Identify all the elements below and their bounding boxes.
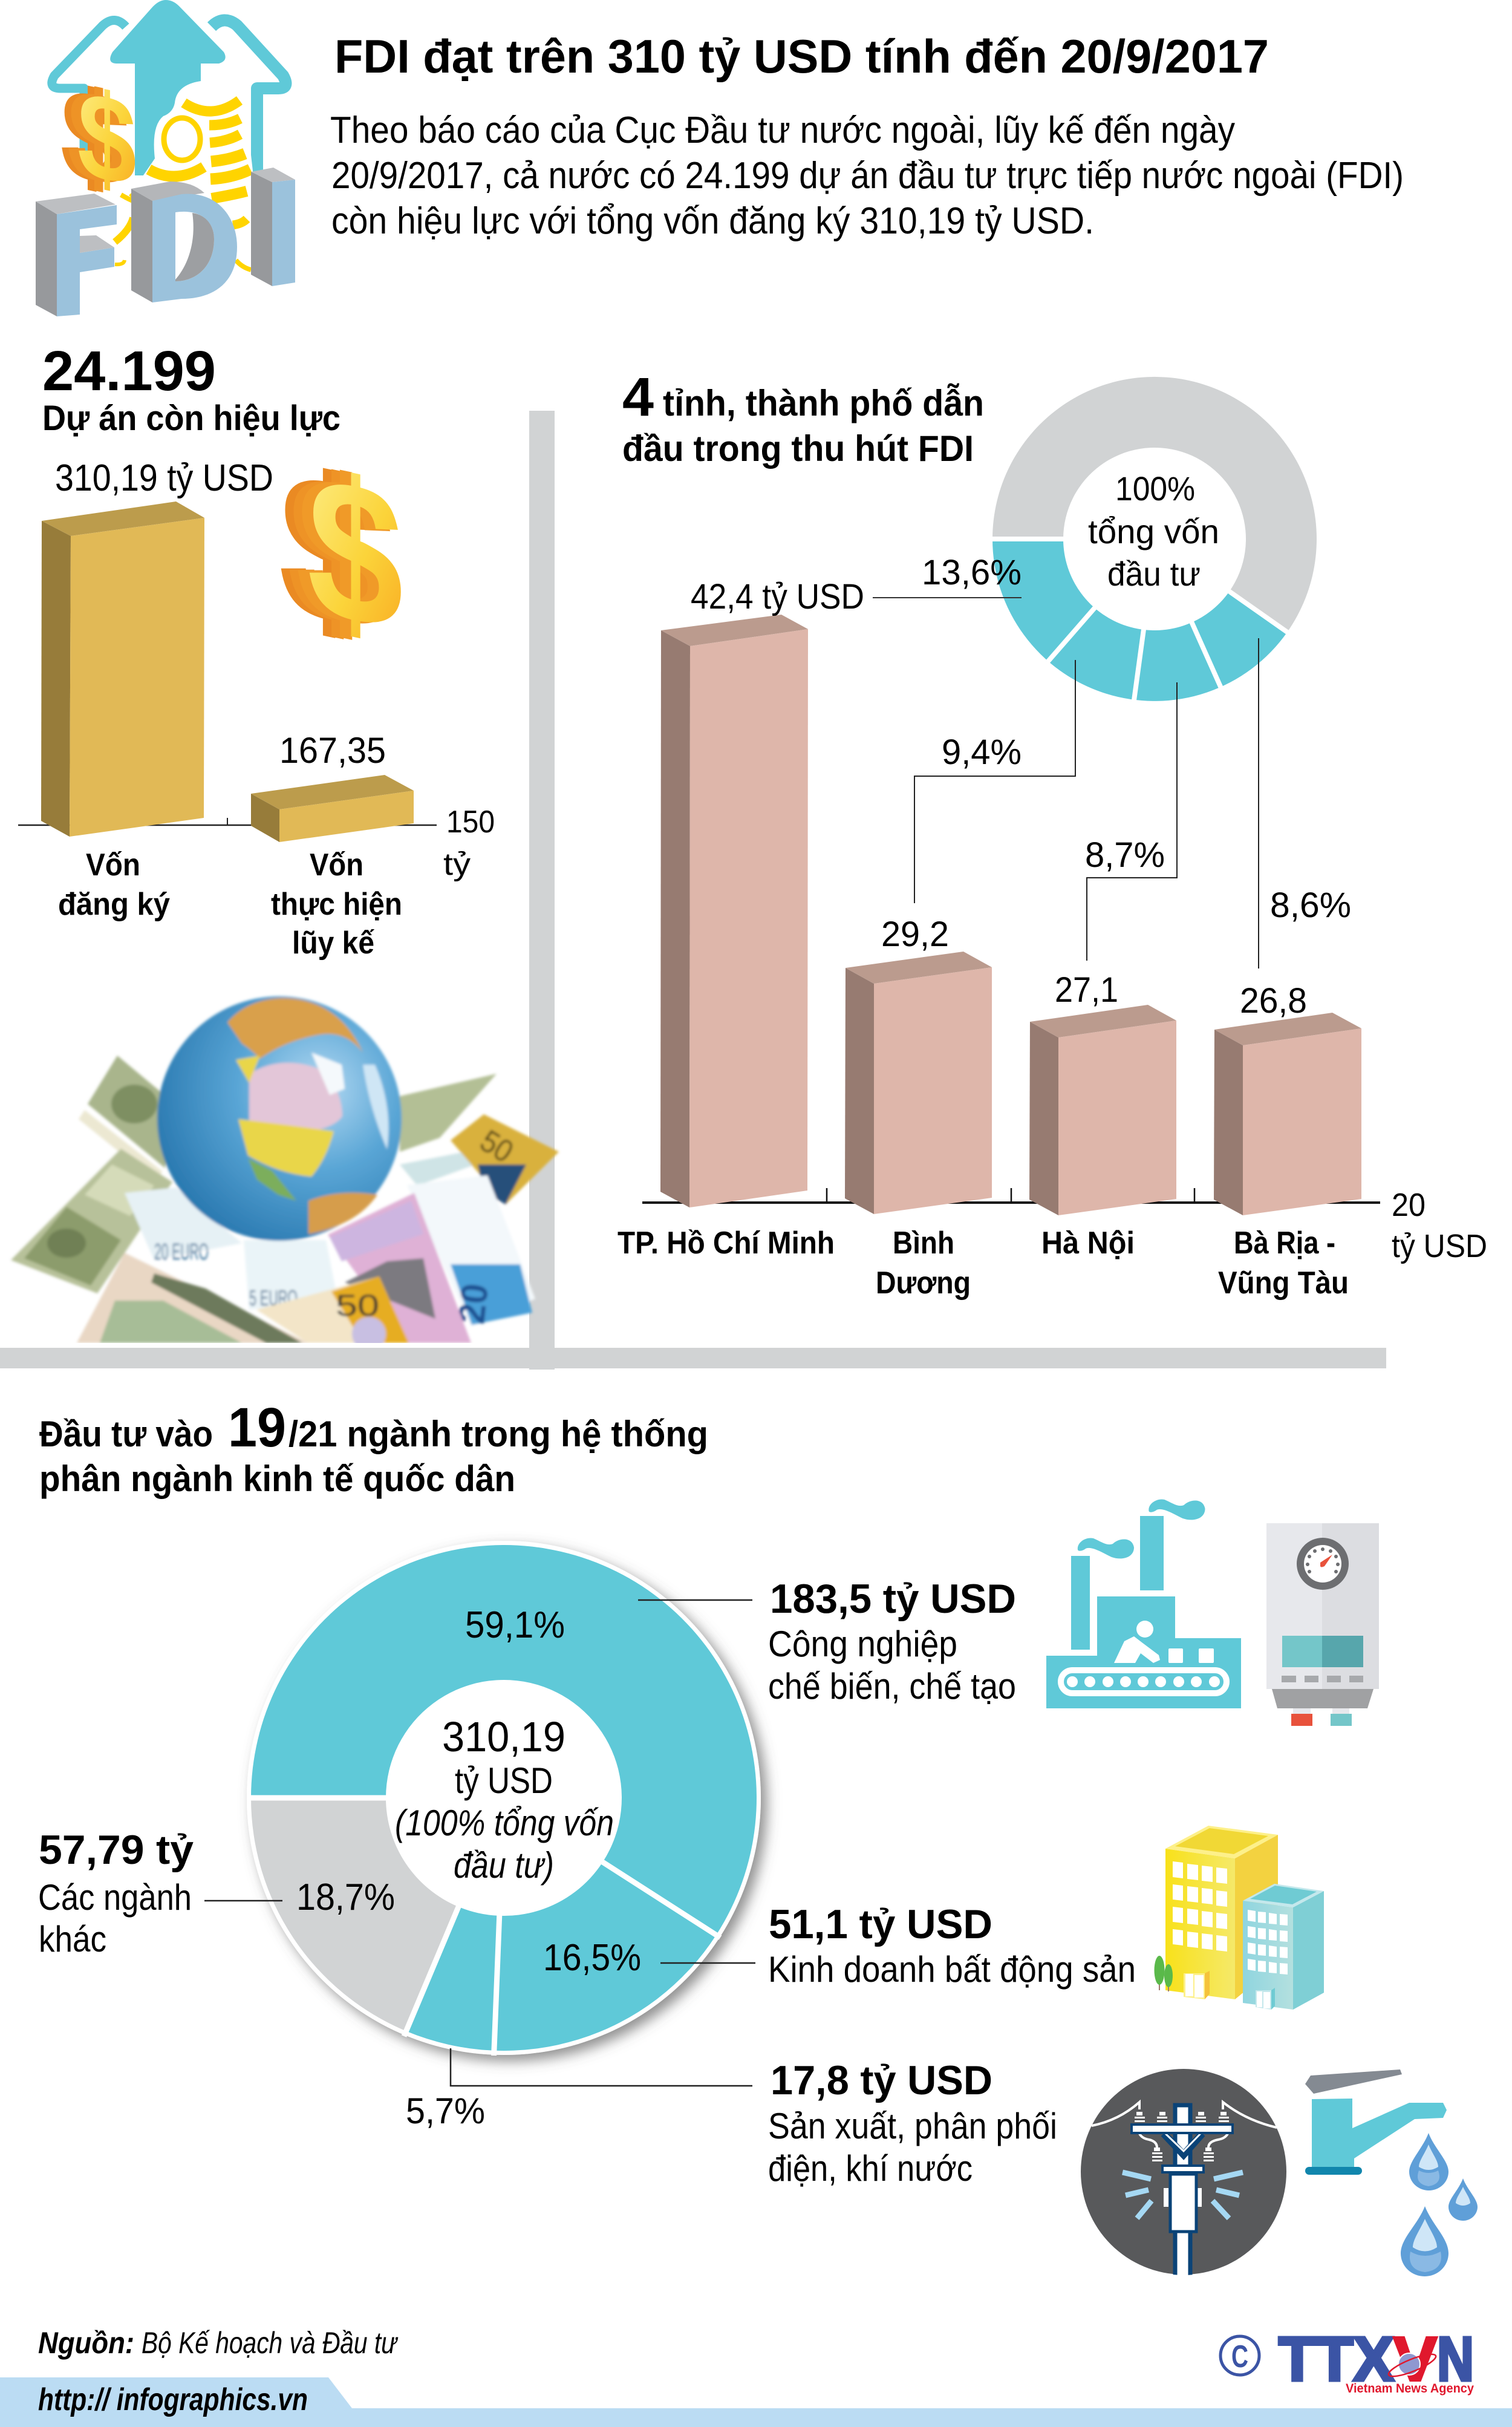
bar chart: top 4 provinces: 20 bbox=[1392, 1187, 1426, 1223]
bar chart: registered vs implemented capital: 167,35 bbox=[279, 730, 386, 771]
bar chart: registered vs implemented capital: 310,19 tỷ USD bbox=[55, 457, 273, 499]
source: Bộ Kế hoạch và Đầu tư bbox=[142, 2326, 399, 2360]
callouts: donut percentages with leader lines bbox=[873, 553, 1351, 969]
donut chart: share of total capital: đầu tư bbox=[1107, 555, 1201, 593]
bar chart: registered vs implemented capital: lũy kế bbox=[292, 926, 374, 961]
banknote: euro pale strip right bbox=[400, 1151, 474, 1185]
banknote: euro five bbox=[244, 1240, 337, 1310]
globe bbox=[157, 996, 402, 1241]
bar: registered capital bbox=[41, 501, 204, 837]
donut chart: capital by sector bbox=[247, 1541, 761, 2056]
banknote: dollar top-left bbox=[79, 1054, 168, 1175]
stat: 24.199 projects: 24.199 bbox=[42, 339, 216, 402]
heading: 19 of 21 sectors bbox=[39, 1397, 708, 1499]
icon: golden dollar sign: $ bbox=[289, 430, 385, 675]
callout: real estate: Kinh doanh bất động sản bbox=[768, 1949, 1136, 1990]
banknote: euro five: 5 EURO bbox=[249, 1285, 298, 1310]
footer band bbox=[0, 2377, 1512, 2427]
logo: copyright and TTXVN: V bbox=[1393, 2324, 1437, 2394]
icon: water drops bbox=[1401, 2133, 1478, 2276]
bar chart: top 4 provinces: Vũng Tàu bbox=[1218, 1266, 1349, 1301]
callout: electricity, gas and water: điện, khí nước bbox=[768, 2148, 973, 2189]
callout: electricity, gas and water bbox=[406, 2048, 1057, 2189]
bar chart: top 4 provinces: tỷ USD bbox=[1392, 1228, 1487, 1264]
banknote: euro twenty: 20 EURO bbox=[154, 1240, 209, 1265]
banknote: euro white right bbox=[407, 1175, 535, 1327]
stat: 24.199 projects bbox=[42, 339, 341, 438]
heading: top 4 provinces: 4 bbox=[622, 367, 654, 428]
bar: Binh Duong bbox=[845, 952, 992, 1214]
logo: copyright and TTXVN: C bbox=[1231, 2339, 1248, 2374]
bar chart: registered vs implemented capital bbox=[18, 457, 495, 961]
bar chart: registered vs implemented capital: 150 bbox=[446, 805, 495, 840]
icon: golden dollar sign: $ bbox=[281, 428, 377, 673]
logo: copyright and TTXVN: TTX bbox=[1279, 2324, 1394, 2394]
callout: manufacturing bbox=[638, 1576, 1016, 1707]
donut chart: capital by sector: 16,5% bbox=[543, 1937, 641, 1979]
callout: electricity, gas and water: 5,7% bbox=[406, 2091, 485, 2131]
bar chart: top 4 provinces: Dương bbox=[876, 1266, 971, 1301]
heading: 19 of 21 sectors: Đầu tư vào bbox=[39, 1414, 213, 1454]
donut chart: capital by sector: tỷ USD bbox=[455, 1760, 553, 1801]
callout: manufacturing: chế biến, chế tạo bbox=[768, 1666, 1016, 1707]
stat: 24.199 projects: Dự án còn hiệu lực bbox=[42, 399, 341, 438]
bar chart: top 4 provinces: TP. Hồ Chí Minh bbox=[618, 1226, 835, 1261]
panel divider: horizontal bar bbox=[0, 1348, 1386, 1368]
callout: manufacturing: Công nghiệp bbox=[768, 1624, 957, 1664]
heading: top 4 provinces: đầu trong thu hút FDI bbox=[622, 428, 974, 469]
bar chart: top 4 provinces: 42,4 tỷ USD bbox=[691, 577, 864, 616]
callouts: donut percentages with leader lines: 13,6% bbox=[922, 553, 1022, 592]
icon: boiler bbox=[1266, 1523, 1379, 1726]
bar chart: top 4 provinces: Bình bbox=[893, 1226, 954, 1261]
bar: Ba Ria - Vung Tau bbox=[1214, 1013, 1361, 1215]
bar chart: registered vs implemented capital: đăng ký bbox=[58, 887, 170, 922]
banknote: dollar left lower bbox=[11, 1149, 172, 1293]
icon: electric pole bbox=[1081, 2069, 1286, 2281]
callout: real estate: 51,1 tỷ USD bbox=[769, 1901, 992, 1947]
website url: http:// infographics.vn bbox=[38, 2382, 308, 2417]
banknote: dollar right bbox=[400, 1074, 497, 1152]
callout: other sectors: 57,79 tỷ bbox=[39, 1827, 194, 1873]
donut chart: capital by sector: đầu tư) bbox=[454, 1845, 554, 1886]
donut chart: capital by sector: 59,1% bbox=[465, 1604, 565, 1646]
callouts: donut percentages with leader lines: 8,6% bbox=[1270, 886, 1351, 925]
heading: top 4 provinces: tỉnh, thành phố dẫn bbox=[663, 383, 984, 423]
icon: golden dollar sign: $ bbox=[298, 430, 394, 675]
banknote: euro twenty bbox=[125, 1187, 242, 1265]
icon: small dollar sign: $ bbox=[77, 63, 137, 214]
banknote: yellow fifty bottom: 50 bbox=[336, 1289, 379, 1322]
bar chart: top 4 provinces: Bà Rịa - bbox=[1234, 1226, 1335, 1261]
callout: other sectors: khác bbox=[39, 1919, 106, 1959]
bar: Ha Noi bbox=[1029, 1005, 1176, 1215]
icon: buildings bbox=[1154, 1826, 1324, 2010]
callout: electricity, gas and water: Sản xuất, phân phối bbox=[768, 2106, 1057, 2146]
logo: copyright and TTXVN bbox=[1220, 2324, 1474, 2396]
icon: water tap bbox=[1305, 2069, 1478, 2276]
intro paragraph bbox=[330, 109, 1404, 242]
icon: small dollar sign: $ bbox=[62, 62, 122, 212]
logo: copyright and TTXVN: Vietnam News Agency bbox=[1346, 2382, 1474, 2396]
source: Nguồn: bbox=[38, 2326, 134, 2360]
heading: 19 of 21 sectors: /21 ngành trong hệ thống bbox=[288, 1414, 708, 1454]
bar chart: top 4 provinces bbox=[618, 577, 1487, 1301]
banknote: fifty dollar bottom-left bbox=[77, 1253, 308, 1343]
bar chart: registered vs implemented capital: tỷ bbox=[443, 847, 471, 882]
bar chart: top 4 provinces: 29,2 bbox=[881, 915, 949, 954]
icon: golden dollar sign: $ bbox=[307, 431, 403, 676]
banknote: euro white right: 20 bbox=[451, 1282, 497, 1325]
bar: implemented capital bbox=[251, 775, 414, 842]
banknote: yellow fifty bbox=[451, 1114, 559, 1204]
callout: other sectors: Các ngành bbox=[38, 1877, 192, 1918]
callouts: donut percentages with leader lines: 8,7% bbox=[1085, 835, 1165, 875]
source bbox=[38, 2326, 399, 2360]
donut chart: share of total capital bbox=[988, 377, 1317, 705]
banknote: purple note bbox=[328, 1193, 471, 1343]
heading: 19 of 21 sectors: phân ngành kinh tế quốc dân bbox=[39, 1458, 515, 1499]
donut chart: capital by sector: 18,7% bbox=[296, 1877, 395, 1918]
donut chart: share of total capital: tổng vốn bbox=[1088, 512, 1219, 550]
bar chart: registered vs implemented capital: thực hiện bbox=[271, 887, 402, 922]
callout: real estate bbox=[660, 1901, 1136, 1990]
banknote: yellow fifty: 50 bbox=[474, 1123, 519, 1170]
bar chart: top 4 provinces: Hà Nội bbox=[1041, 1226, 1135, 1261]
icon: small dollar sign: $ bbox=[69, 62, 128, 213]
bar chart: registered vs implemented capital: Vốn bbox=[310, 848, 363, 883]
donut chart: capital by sector: 310,19 bbox=[442, 1713, 565, 1760]
title: FDI đạt trên 310 tỷ USD tính đến 20/9/2017 bbox=[334, 30, 1269, 83]
donut chart: share of total capital: 100% bbox=[1115, 469, 1195, 508]
logo: copyright and TTXVN: N bbox=[1437, 2324, 1474, 2394]
intro paragraph: 20/9/2017, cả nước có 24.199 dự án đầu tư trực tiếp nước ngoài (FDI) bbox=[331, 155, 1404, 197]
icon: FDI logo with arrows, coins and dollar sign bbox=[36, 0, 295, 316]
icon: factory bbox=[1046, 1499, 1241, 1708]
callout: other sectors bbox=[38, 1827, 282, 1959]
intro paragraph: còn hiệu lực với tổng vốn đăng ký 310,19 tỷ USD. bbox=[331, 200, 1094, 242]
panel divider: vertical bar bbox=[529, 411, 555, 1370]
photo: globe on banknotes bbox=[11, 996, 559, 1351]
intro paragraph: Theo báo cáo của Cục Đầu tư nước ngoài, lũy kế đến ngày bbox=[330, 109, 1235, 151]
heading: top 4 provinces bbox=[622, 367, 984, 469]
donut chart: capital by sector: (100% tổng vốn bbox=[395, 1803, 614, 1843]
bar chart: top 4 provinces: 27,1 bbox=[1055, 970, 1118, 1010]
bar chart: top 4 provinces: 26,8 bbox=[1240, 981, 1307, 1021]
bar chart: registered vs implemented capital: Vốn bbox=[86, 848, 140, 883]
callout: manufacturing: 183,5 tỷ USD bbox=[770, 1576, 1016, 1622]
callouts: donut percentages with leader lines: 9,4% bbox=[942, 733, 1022, 772]
banknote: yellow fifty bottom bbox=[256, 1276, 409, 1351]
heading: 19 of 21 sectors: 19 bbox=[228, 1397, 286, 1458]
bar: Ho Chi Minh City bbox=[660, 615, 808, 1207]
callout: electricity, gas and water: 17,8 tỷ USD bbox=[771, 2057, 992, 2103]
